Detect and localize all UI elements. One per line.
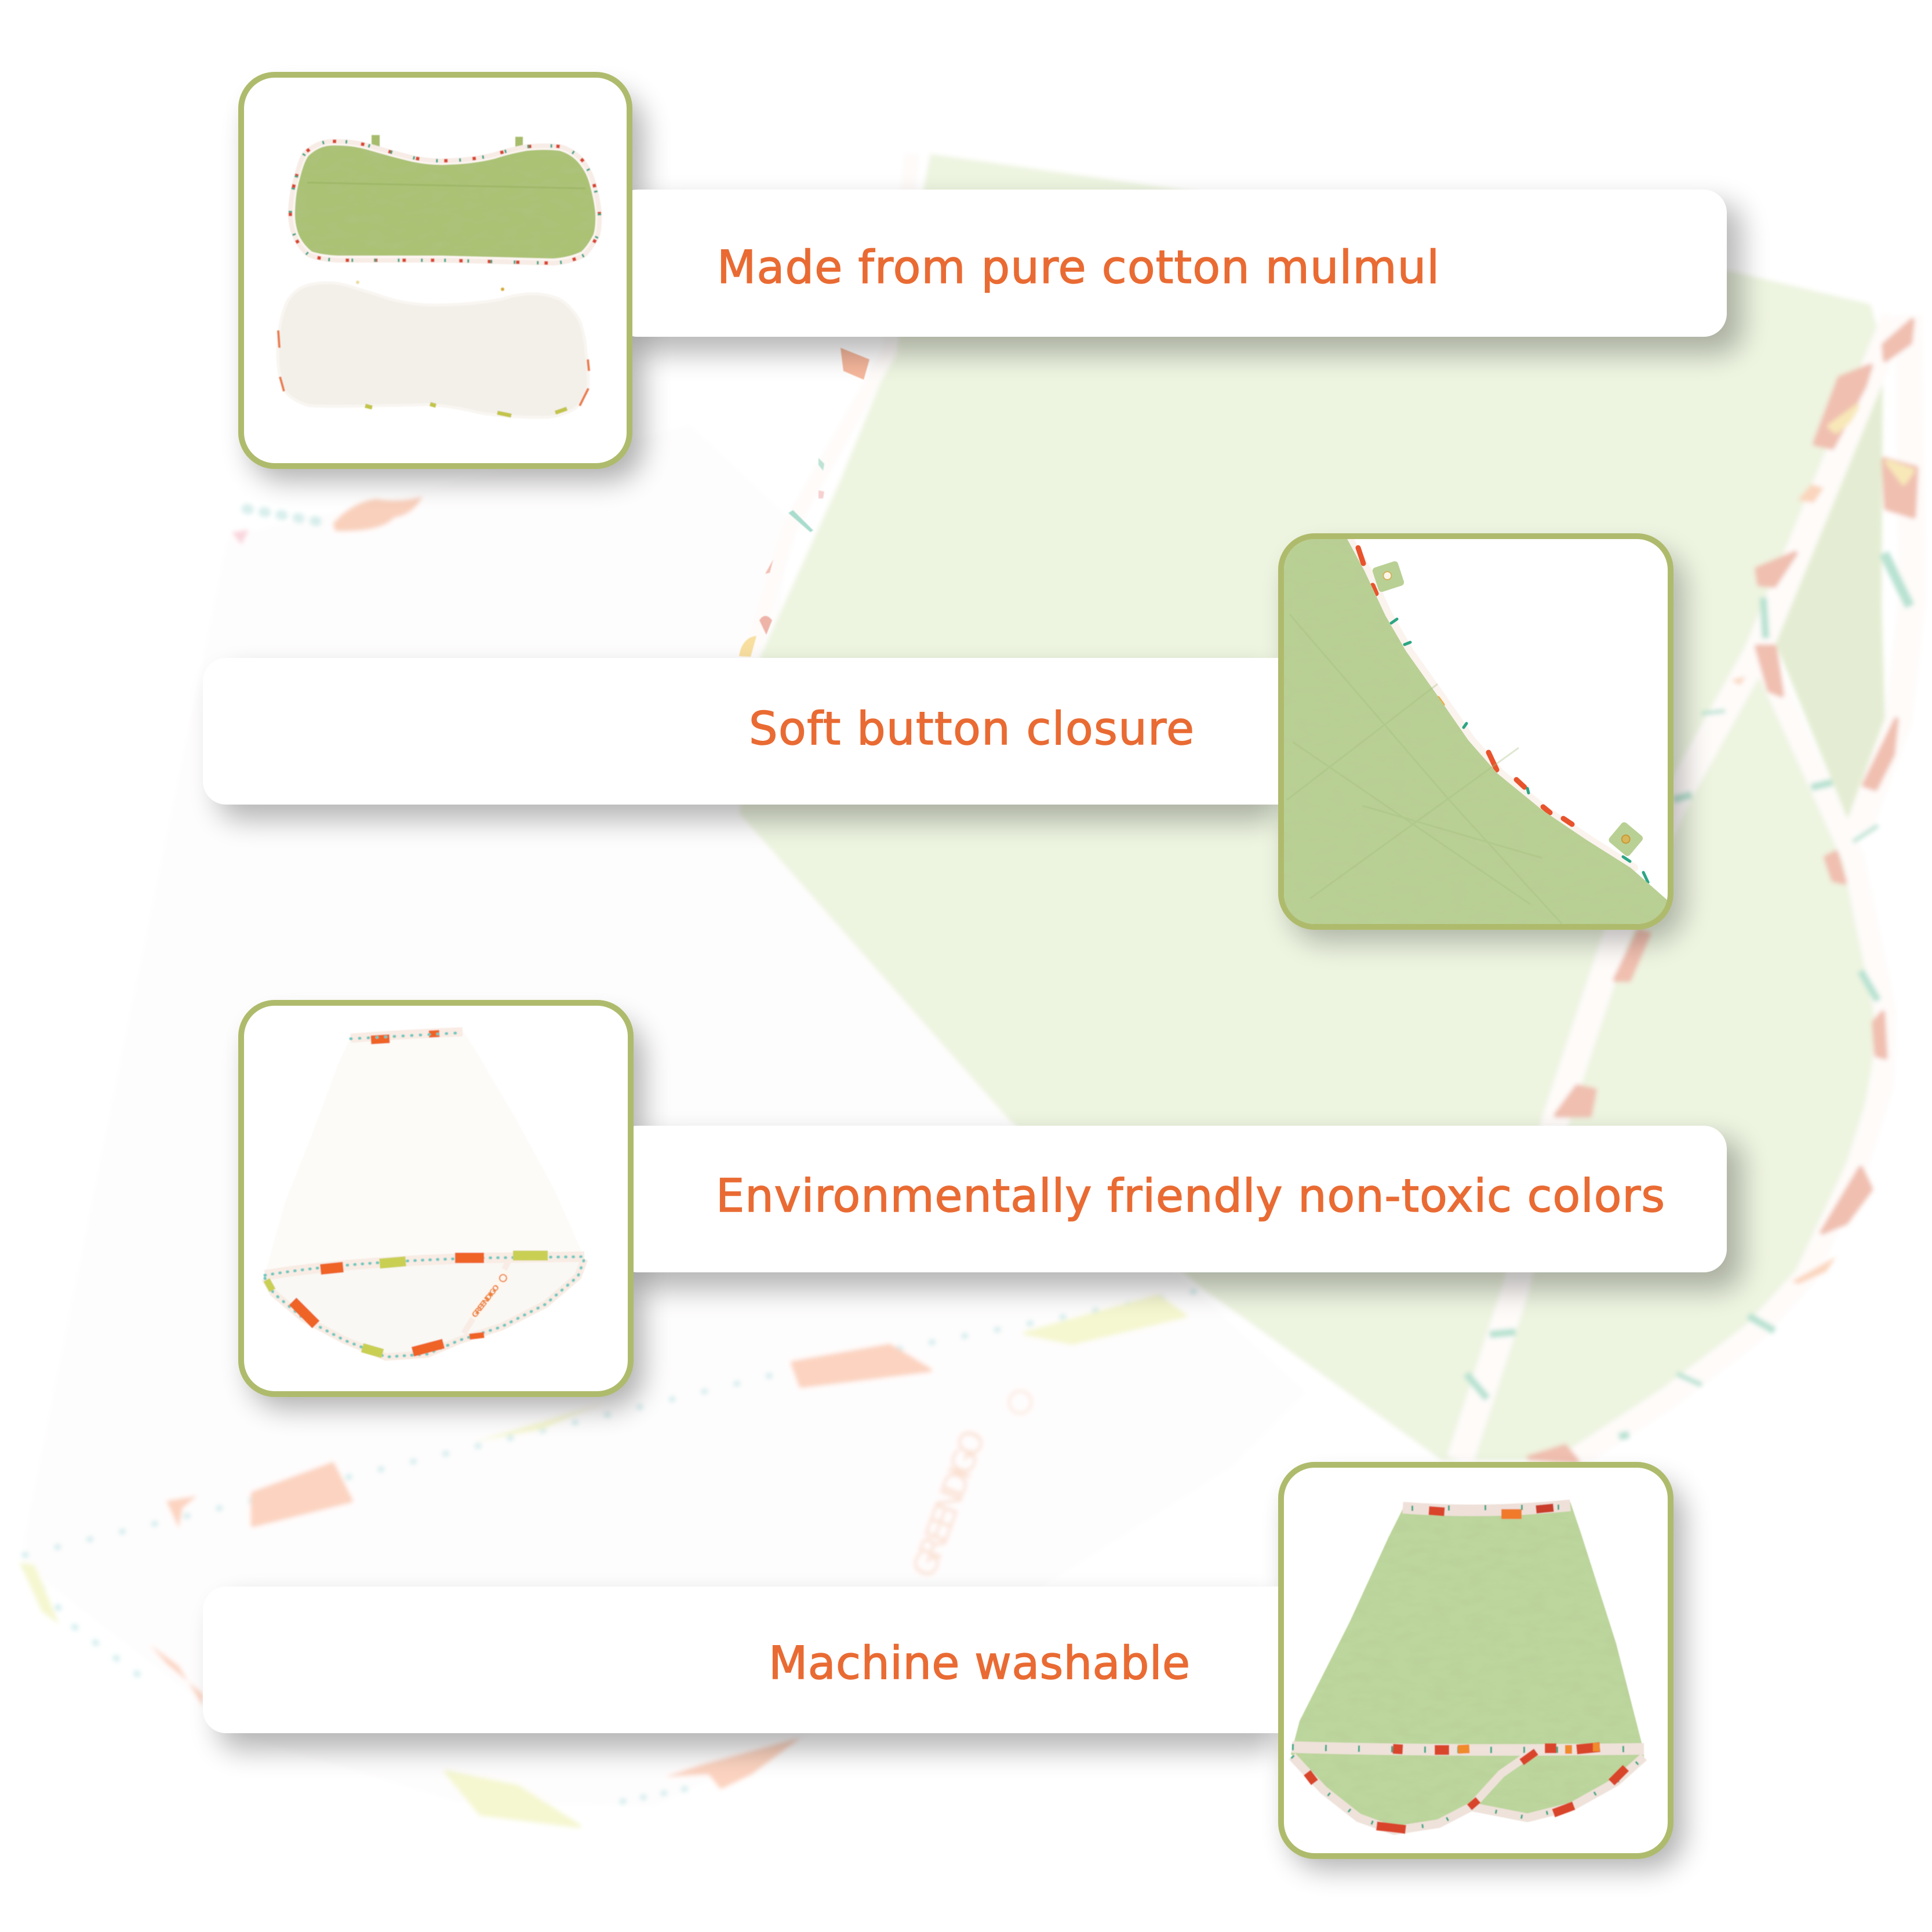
white cloth: GREENDIGO [905,1425,993,1582]
card 4: folded green cloth [1281,1465,1671,1856]
icon: button tab top [1371,561,1405,593]
trim flecks [1348,536,1648,882]
text: Made from pure cotton mulmul: Made from pure cotton mulmul [717,242,1439,294]
bar shadows [217,203,1742,1751]
left trim flecks [739,348,869,657]
panel: label bars [203,190,1742,1751]
bar 3 [614,1126,1727,1272]
icon: green cloth [290,135,599,263]
green cloth [739,154,1916,1467]
trim top-left [333,497,423,531]
white cloth [20,425,1306,1826]
card shadows [249,93,1684,1869]
faint cloth shade at top [655,134,1658,144]
panel: cards [241,75,1671,1856]
trim: hem [265,1032,584,1357]
bar 1 [614,190,1727,337]
bar 2 [203,658,1304,805]
icon: white cloth [278,281,589,417]
label tag: GREENDIGO [470,1283,501,1320]
text: Environmentally friendly non-toxic colors: Environmentally friendly non-toxic colors [716,1170,1665,1222]
card 3: folded white cloth [241,1003,631,1394]
text: Soft button closure: Soft button closure [749,703,1194,755]
bar 4 [203,1587,1304,1733]
icon: button tab bottom [1607,821,1644,857]
text: Machine washable: Machine washable [769,1638,1190,1690]
trim flecks [1529,321,1916,1461]
label tag [468,1269,512,1321]
green fabric [1278,530,1669,933]
card 1: two burp cloths [241,75,630,466]
card 2: corner close-up [1278,530,1671,933]
